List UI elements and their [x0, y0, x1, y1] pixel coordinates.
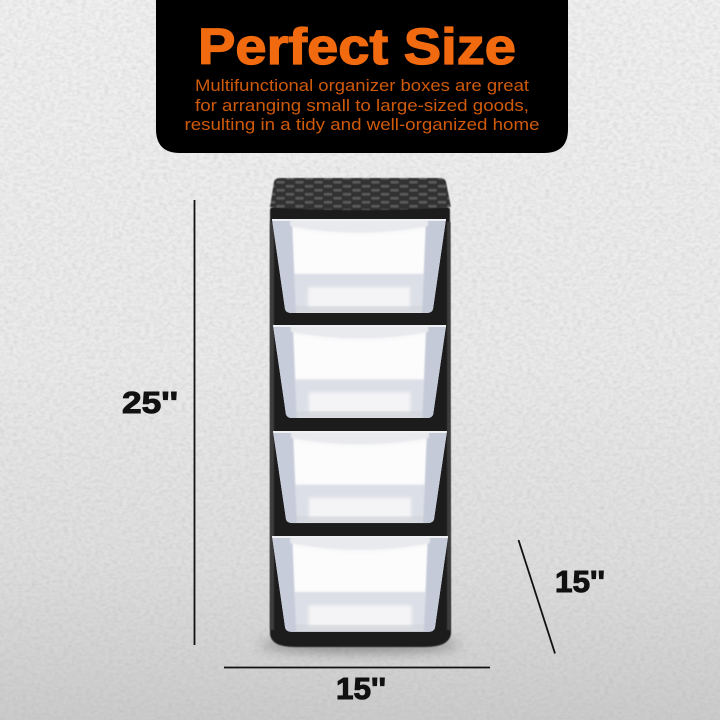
drawer 4 [272, 536, 448, 634]
depth label: 15'' [555, 564, 605, 599]
drawer 1 [272, 219, 446, 315]
floor shadow [260, 638, 460, 652]
drawer 2 [273, 325, 446, 420]
description text: for arranging small to large-sized goods, [195, 97, 529, 115]
patterned lid [270, 178, 451, 210]
title: Perfect Size [198, 18, 516, 75]
description text [184, 77, 540, 134]
storage tower with four drawers [260, 178, 460, 652]
description text: Multifunctional organizer boxes are great [195, 77, 529, 95]
depth dimension line [518, 540, 555, 654]
width dimension line [224, 666, 490, 668]
height label: 25'' [122, 385, 178, 420]
frame [270, 207, 451, 647]
header panel [156, 0, 568, 153]
drawer 3 [273, 431, 447, 525]
description text: resulting in a tidy and well-organized home [184, 116, 540, 134]
frame edges [270, 222, 450, 630]
height dimension line [194, 200, 196, 645]
width label: 15'' [336, 671, 386, 706]
